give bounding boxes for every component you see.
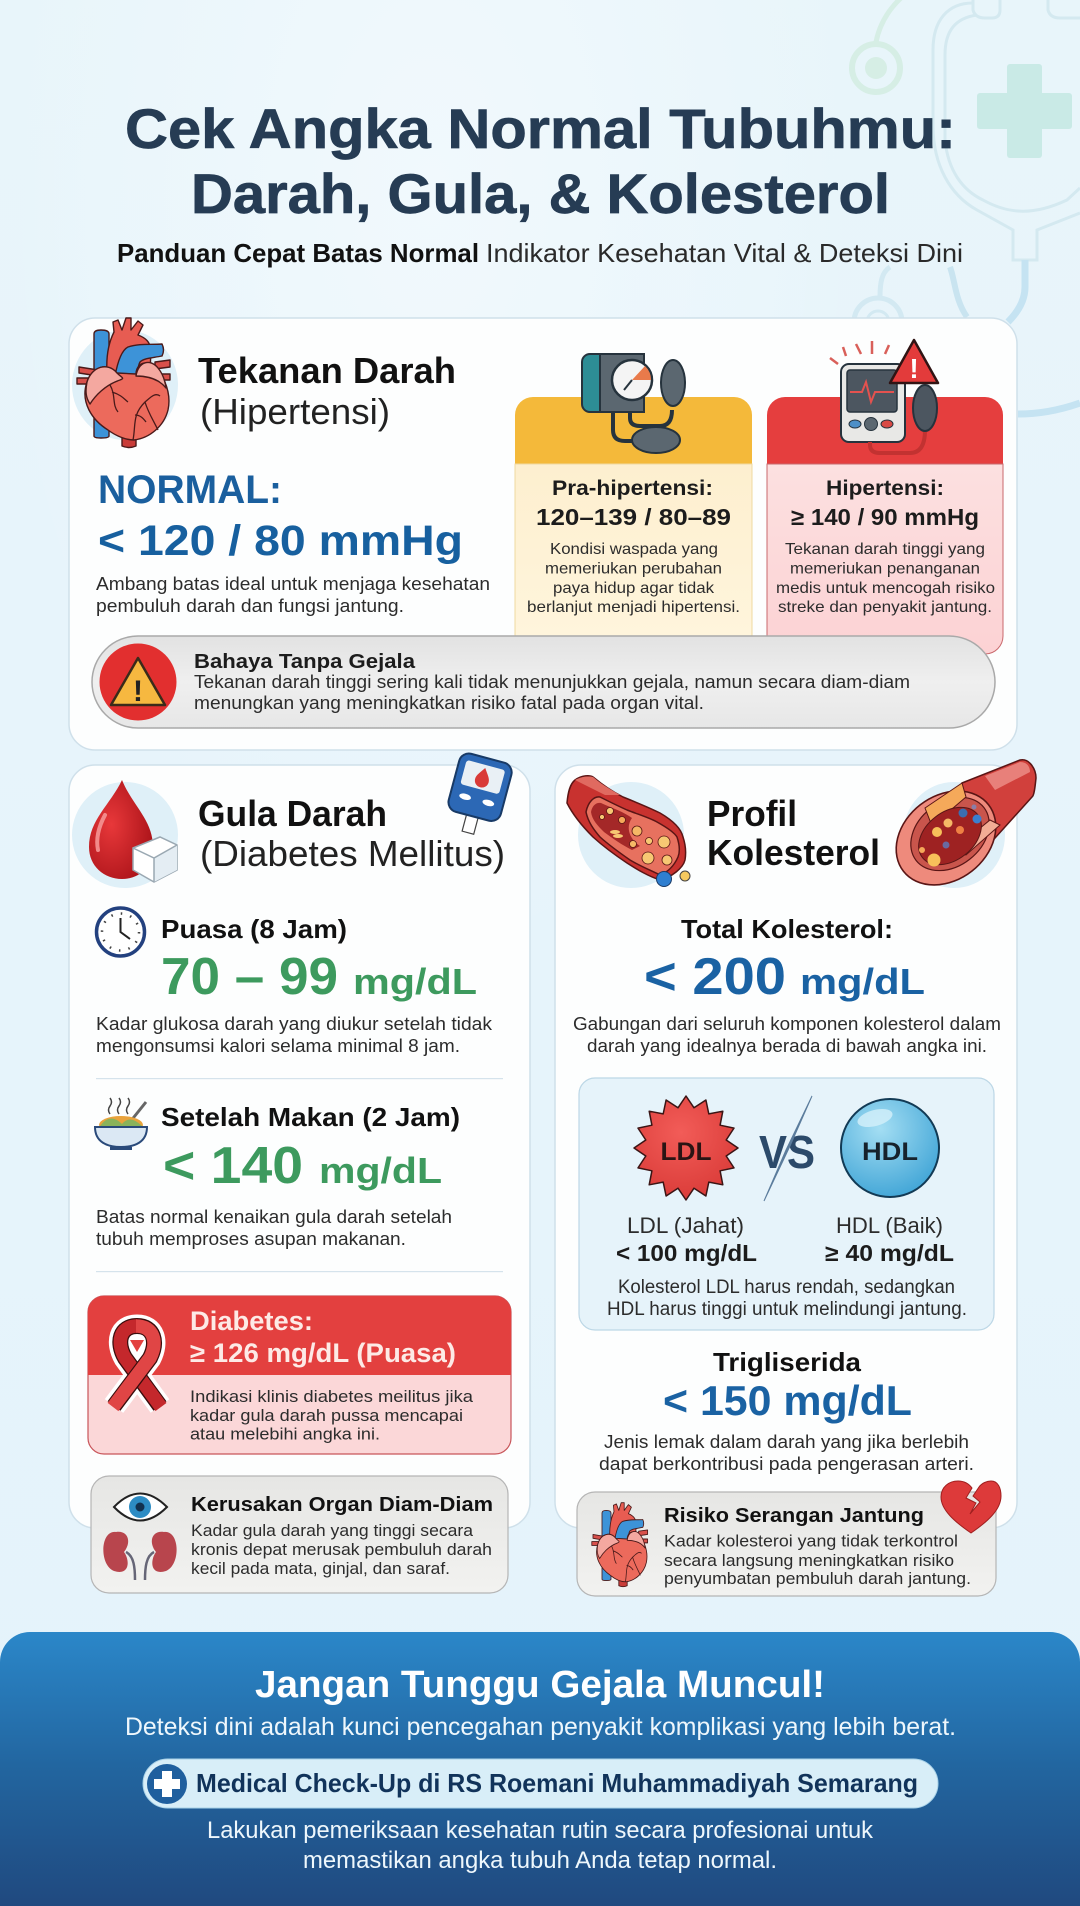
section: total kolesterol: mg/dL <box>800 961 925 1002</box>
section: setelah makan: < 140 <box>163 1137 303 1195</box>
card: pra-hipertensi <box>515 354 752 636</box>
callout text: Tekanan darah tinggi sering kali tidak menunjukkan gejala, namun secara diam-diam <box>194 672 910 692</box>
heading: tekanan darah: (Hipertensi) <box>200 391 390 432</box>
call to action pill <box>143 1759 938 1808</box>
title: Cek Angka Normal Tubuhmu: <box>125 97 956 160</box>
section: setelah makan: Batas normal kenaikan gula darah setelah <box>96 1207 452 1227</box>
diabetes text: Indikasi klinis diabetes meilitus jika <box>190 1387 474 1406</box>
panel: gula darah <box>69 751 530 1593</box>
hdl value: HDL (Baik) <box>836 1213 943 1238</box>
section: total kolesterol: Gabungan dari seluruh komponen kolesterol dalam <box>573 1014 1001 1034</box>
heading: tekanan darah <box>198 350 456 432</box>
icon: glucose meter <box>442 751 514 840</box>
callout: bahaya tanpa gejala <box>92 636 995 728</box>
callout text: Bahaya Tanpa Gejala <box>194 651 416 673</box>
card text: hipertensi: ≥ 140 / 90 mmHg <box>791 504 979 530</box>
call to action text: Medical Check-Up di RS Roemani Muhammadiyah Semarang <box>196 1768 918 1798</box>
icon: ldl particle: LDL <box>661 1138 711 1166</box>
card text: pra-hipertensi <box>527 477 740 616</box>
icon: heart <box>72 318 178 448</box>
comparison note: HDL harus tinggi untuk melindungi jantung. <box>607 1299 967 1320</box>
section: puasa <box>96 914 493 1056</box>
footer note: memastikan angka tubuh Anda tetap normal. <box>303 1847 777 1874</box>
section: puasa: 70 – 99 <box>161 948 338 1006</box>
normal description: Ambang batas ideal untuk menjaga kesehatan <box>96 573 490 594</box>
card text: hipertensi: medis untuk mencogah risiko <box>776 580 995 597</box>
heading: gula darah: Gula Darah <box>198 793 387 834</box>
card: ldl vs hdl <box>579 1078 994 1330</box>
callout text <box>191 1494 493 1578</box>
hdl value <box>825 1213 954 1266</box>
section: total kolesterol <box>573 914 1001 1056</box>
section: puasa: mengonsumsi kalori selama minimal 8 jam. <box>96 1036 460 1056</box>
section: trigliserida <box>599 1347 974 1474</box>
callout text: penyumbatan pembuluh darah jantung. <box>664 1569 971 1588</box>
card: diabetes <box>88 1296 511 1454</box>
callout text <box>664 1505 971 1588</box>
card text: pra-hipertensi: Kondisi waspada yang <box>550 541 718 558</box>
callout text: Kadar gula darah yang tinggi secara <box>191 1521 474 1540</box>
icon: ldl particle <box>634 1096 738 1200</box>
callout text: kecil pada mata, ginjal, dan saraf. <box>191 1559 450 1578</box>
comparison note <box>607 1277 967 1320</box>
heading: profil kolesterol: Profil <box>707 793 797 834</box>
diabetes text <box>190 1306 474 1444</box>
subtitle: Panduan Cepat Batas Normal <box>117 238 479 268</box>
icon: food bowl <box>95 1098 147 1150</box>
icon: warning <box>100 644 176 720</box>
section: setelah makan: Setelah Makan (2 Jam) <box>161 1102 460 1132</box>
callout: risiko serangan jantung <box>577 1481 1001 1596</box>
hdl value: ≥ 40 mg/dL <box>825 1240 954 1266</box>
icon: hdl particle <box>841 1099 939 1197</box>
icon: small heart <box>592 1503 648 1587</box>
icon: vs mark: VS <box>759 1126 815 1178</box>
heading: gula darah <box>198 793 505 874</box>
section: setelah makan: tubuh memproses asupan makanan. <box>96 1229 406 1249</box>
card text: hipertensi: Tekanan darah tinggi yang <box>785 541 985 558</box>
normal description <box>96 573 490 616</box>
section: trigliserida: Jenis lemak dalam darah yang jika berlebih <box>604 1432 969 1452</box>
ldl value <box>616 1213 757 1266</box>
card text: hipertensi <box>776 477 995 616</box>
callout: kerusakan organ <box>91 1476 508 1593</box>
ldl value: < 100 mg/dL <box>616 1240 757 1266</box>
callout text: Risiko Serangan Jantung <box>664 1505 924 1527</box>
callout text: Kerusakan Organ Diam-Diam <box>191 1494 493 1516</box>
section: puasa: Puasa (8 Jam) <box>161 914 347 944</box>
section: total kolesterol: darah yang idealnya berada di bawah angka ini. <box>587 1036 987 1056</box>
heading: profil kolesterol: Kolesterol <box>707 832 880 873</box>
normal description: pembuluh darah dan fungsi jantung. <box>96 595 404 616</box>
icon: ribbon <box>113 1326 161 1407</box>
callout text: menungkan yang meningkatkan risiko fatal pada organ vital. <box>194 693 704 713</box>
icon: clock <box>96 908 144 956</box>
footer heading: Jangan Tunggu Gejala Muncul! <box>255 1664 825 1706</box>
panel: profil kolesterol <box>555 760 1036 1596</box>
footer note <box>207 1817 874 1874</box>
footer subheading: Deteksi dini adalah kunci pencegahan penyakit komplikasi yang lebih berat. <box>125 1713 956 1741</box>
title <box>125 97 956 225</box>
icon: vs mark <box>759 1096 815 1201</box>
section: total kolesterol: < 200 <box>644 948 786 1006</box>
icon: artery left <box>567 776 690 888</box>
normal value: NORMAL: <box>98 468 282 512</box>
callout text <box>194 651 910 713</box>
panel: tekanan darah <box>69 318 1017 750</box>
section: puasa: Kadar glukosa darah yang diukur setelah tidak <box>96 1014 493 1034</box>
callout text: secara langsung meningkatkan risiko <box>664 1551 954 1570</box>
card text: pra-hipertensi: paya hidup agar tidak <box>553 580 715 597</box>
diabetes text: Diabetes: <box>190 1306 313 1336</box>
ldl value: LDL (Jahat) <box>627 1213 744 1238</box>
diabetes text: ≥ 126 mg/dL (Puasa) <box>190 1338 456 1368</box>
card text: hipertensi: streke dan penyakit jantung. <box>778 599 992 616</box>
subtitle <box>117 238 963 268</box>
section: trigliserida: dapat berkontribusi pada pengerasan arteri. <box>599 1454 974 1474</box>
diabetes text: kadar gula darah pussa mencapai <box>190 1406 463 1425</box>
card text: pra-hipertensi: memeriukan perubahan <box>545 560 722 578</box>
subtitle: Indikator Kesehatan Vital & Deteksi Dini <box>486 238 963 268</box>
section: setelah makan: mg/dL <box>319 1150 442 1191</box>
section: setelah makan <box>96 1102 460 1249</box>
decorative stethoscope background <box>852 0 1080 414</box>
icon: eye and kidneys <box>103 1494 177 1580</box>
footer note: Lakukan pemeriksaan kesehatan rutin secara profesionai untuk <box>207 1817 874 1844</box>
heading: tekanan darah: Tekanan Darah <box>198 350 456 391</box>
heading: gula darah: (Diabetes Mellitus) <box>200 833 505 874</box>
icon: artery right <box>878 760 1036 904</box>
card text: hipertensi: memeriukan penanganan <box>790 560 980 578</box>
card text: pra-hipertensi: berlanjut menjadi hipertensi. <box>527 599 740 616</box>
icon: medical cross <box>147 1764 187 1804</box>
section: trigliserida: Trigliserida <box>713 1347 862 1377</box>
comparison note: Kolesterol LDL harus rendah, sedangkan <box>618 1277 955 1298</box>
icon: alarm monitor: ! <box>909 353 919 384</box>
icon: hdl particle: HDL <box>862 1138 918 1166</box>
footer banner <box>0 1632 1080 1906</box>
icon: warning: ! <box>133 675 143 708</box>
title: Darah, Gula, & Kolesterol <box>191 162 890 225</box>
section: puasa: mg/dL <box>353 961 477 1002</box>
diabetes text: atau melebihi angka ini. <box>190 1424 380 1444</box>
icon: sphygmomanometer <box>582 354 685 453</box>
heading: profil kolesterol <box>707 793 880 873</box>
icon: blood drop and sugar cube <box>72 780 178 888</box>
section: total kolesterol: Total Kolesterol: <box>681 914 893 944</box>
normal value <box>98 468 463 565</box>
icon: alarm monitor <box>830 340 938 453</box>
section: trigliserida: < 150 mg/dL <box>663 1377 912 1424</box>
callout text: Kadar kolesteroi yang tidak terkontrol <box>664 1532 958 1550</box>
callout text: kronis depat merusak pembuluh darah <box>191 1540 492 1559</box>
icon: broken heart <box>941 1481 1001 1533</box>
card text: hipertensi: Hipertensi: <box>826 477 944 500</box>
card: hipertensi <box>767 340 1003 654</box>
card text: pra-hipertensi: Pra-hipertensi: <box>552 477 713 500</box>
normal value: < 120 / 80 mmHg <box>98 517 463 565</box>
card text: pra-hipertensi: 120–139 / 80–89 <box>536 504 731 530</box>
